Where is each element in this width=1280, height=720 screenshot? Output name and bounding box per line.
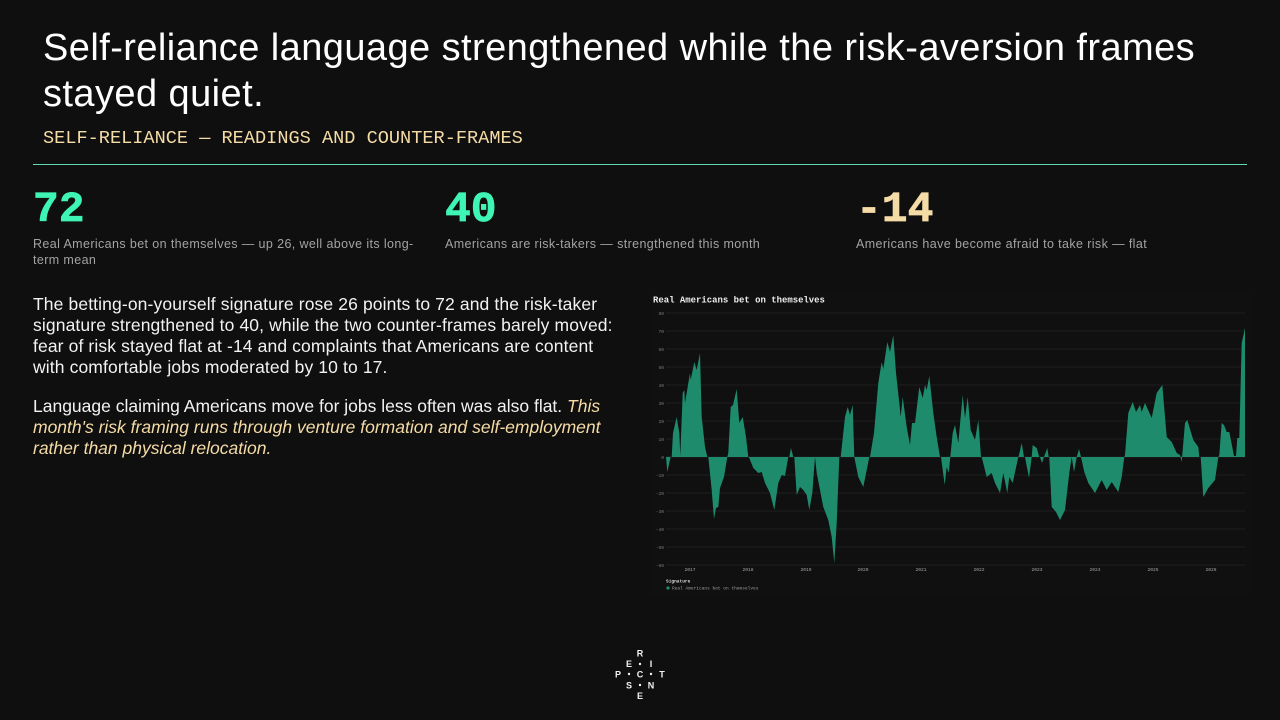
subtitle: SELF-RELIANCE — READINGS AND COUNTER-FRAMES — [43, 128, 523, 149]
area chart — [653, 296, 1245, 592]
stat: -14: Americans have become afraid to take risk — flat — [856, 237, 1147, 251]
x axis labels: 2020 — [857, 567, 869, 573]
x axis labels: 2022 — [973, 567, 985, 573]
stat: 72: 72 — [33, 185, 85, 234]
stat: -14 — [856, 185, 1147, 251]
x axis labels: 2017 — [684, 567, 696, 573]
y axis labels — [656, 311, 664, 569]
logo: S — [626, 680, 632, 690]
stat: 40: Americans are risk-takers — strengthened this month — [445, 237, 760, 251]
body paragraph 1: with comfortable jobs moderated by 10 to 17. — [33, 357, 388, 377]
logo: T — [659, 670, 665, 680]
title: Self-reliance language strengthened while the risk-aversion frames — [43, 27, 1195, 69]
x axis labels: 2024 — [1089, 567, 1101, 573]
body paragraph 1: fear of risk stayed flat at -14 and complaints that Americans are content — [33, 336, 593, 356]
y axis labels: 20 — [658, 419, 664, 425]
body paragraph 1: The betting-on-yourself signature rose 26 points to 72 and the risk-taker — [33, 294, 597, 314]
stat: 40 — [445, 185, 760, 251]
logo: E — [626, 659, 632, 669]
y axis labels: -30 — [656, 509, 664, 515]
legend: Real Americans bet on themselves — [672, 586, 759, 592]
logo: N — [648, 680, 654, 690]
x axis labels: 2019 — [800, 567, 812, 573]
logo: C — [637, 670, 644, 680]
logo — [615, 648, 665, 701]
y axis labels: -10 — [656, 473, 664, 479]
title — [43, 27, 1195, 115]
x axis labels: 2025 — [1147, 567, 1159, 573]
y axis labels: -20 — [656, 491, 664, 497]
stat: 72: term mean — [33, 253, 96, 267]
logo: P — [615, 670, 621, 680]
y axis labels: -40 — [656, 527, 664, 533]
y axis labels: -50 — [656, 545, 664, 551]
y axis labels: 80 — [658, 311, 664, 317]
body paragraph 1: signature strengthened to 40, while the two counter-frames barely moved: — [33, 315, 613, 335]
body paragraph 2: month's risk framing runs through venture formation and self-employment — [33, 417, 600, 437]
x axis labels: 2026 — [1205, 567, 1217, 573]
y axis labels: -60 — [656, 563, 664, 569]
stat: 72: Real Americans bet on themselves — up 26, well above its long- — [33, 237, 414, 251]
legend — [666, 578, 759, 592]
stat: -14: -14 — [856, 185, 933, 234]
logo: I — [650, 659, 652, 669]
x axis labels: 2018 — [742, 567, 754, 573]
body paragraph 2 — [33, 396, 602, 458]
y axis labels: 30 — [658, 401, 664, 407]
stat: 72 — [33, 185, 414, 267]
x axis labels: 2023 — [1031, 567, 1043, 573]
body paragraph 2: rather than physical relocation. — [33, 438, 271, 458]
title: stayed quiet. — [43, 73, 264, 115]
body paragraph 1 — [33, 294, 613, 377]
divider — [33, 164, 1247, 165]
logo: R — [637, 648, 644, 658]
stat: 40: 40 — [445, 185, 497, 234]
y axis labels: 50 — [658, 365, 664, 371]
area series — [666, 328, 1245, 563]
y axis labels: 0 — [661, 455, 664, 461]
x axis labels — [684, 567, 1217, 573]
y axis labels: 40 — [658, 383, 664, 389]
legend: Signature — [666, 578, 691, 584]
x axis labels: 2021 — [915, 567, 927, 573]
logo: E — [637, 691, 643, 701]
chart title: Real Americans bet on themselves — [653, 296, 825, 306]
y axis labels: 10 — [658, 437, 664, 443]
y axis labels: 70 — [658, 329, 664, 335]
y axis labels: 60 — [658, 347, 664, 353]
body paragraph 2: Language claiming Americans move for jobs less often was also flat. This — [33, 396, 600, 416]
